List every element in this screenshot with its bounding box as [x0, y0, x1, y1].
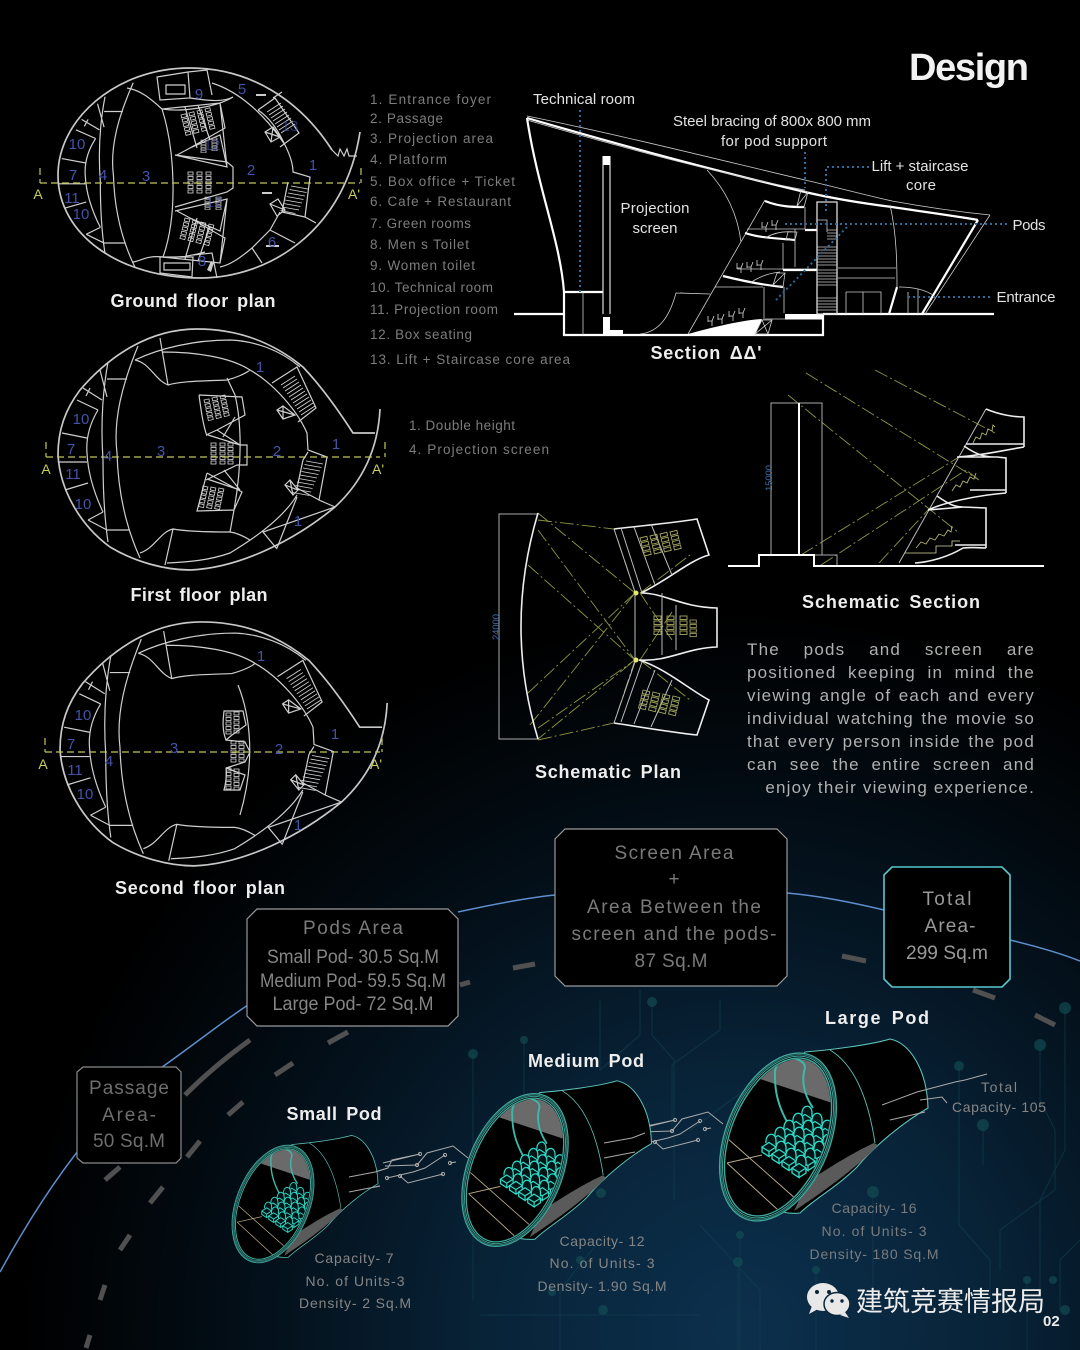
second floor plan: A — [38, 756, 48, 772]
medium pod stats — [538, 1233, 666, 1294]
first floor plan: A — [41, 461, 51, 477]
room numbers: 1 — [309, 157, 317, 174]
room legend: 10. Technical room — [370, 280, 493, 295]
explanatory paragraph: viewing angle of each and every — [747, 686, 1035, 705]
room legend: 7. Green rooms — [370, 216, 471, 231]
room legend: 12. Box seating — [370, 327, 472, 342]
schematic section drawing — [728, 370, 1044, 566]
box: screen area: + — [668, 869, 680, 890]
dimension 24000: 24000 — [491, 614, 502, 640]
first floor notes: 4. Projection screen — [409, 442, 549, 457]
box: passage area: Passage — [89, 1078, 169, 1099]
explanatory paragraph: positioned keeping in mind the — [747, 663, 1035, 682]
page number: 02 — [1043, 1313, 1060, 1330]
box: screen area — [555, 829, 787, 986]
room numbers: 4 — [105, 753, 113, 770]
room numbers: 5 — [238, 81, 246, 98]
room numbers: 7 — [67, 736, 75, 753]
box: total area: 299 Sq.m — [906, 943, 988, 964]
first floor notes: 1. Double height — [409, 418, 515, 433]
box: pods area: Small Pod- 30.5 Sq.M — [267, 947, 439, 968]
room numbers: 12 — [206, 194, 222, 211]
room numbers: 3 — [142, 168, 150, 185]
ground floor plan: A' — [348, 186, 360, 202]
box: screen area: screen and the pods- — [572, 924, 776, 945]
explanatory paragraph — [747, 640, 1035, 797]
second floor plan: A' — [370, 756, 382, 772]
room numbers: 1 — [331, 726, 339, 743]
box: pods area: Large Pod- 72 Sq.M — [272, 994, 434, 1015]
explanatory paragraph: that every person inside the pod — [747, 732, 1035, 751]
room numbers: 10 — [73, 411, 89, 428]
small pod — [216, 1127, 378, 1275]
second floor plan — [38, 622, 387, 866]
section labels: Technical room — [533, 91, 635, 108]
large pod stats: No. of Units- 3 — [822, 1223, 927, 1239]
large pod heading: Large Pod — [825, 1008, 929, 1028]
room numbers: 3 — [170, 740, 178, 757]
room legend: 6. Cafe + Restaurant — [370, 194, 511, 209]
room numbers: 11 — [67, 762, 83, 779]
circuit traces between pods — [347, 1112, 723, 1194]
first floor plan — [41, 329, 385, 570]
section labels: Entrance — [996, 289, 1056, 306]
room numbers: 7 — [69, 167, 77, 184]
section labels: Pods — [1012, 217, 1046, 234]
watermark text: 建筑竞赛情报局 — [856, 1287, 1045, 1317]
section AA heading: Section ΔΔ' — [650, 343, 762, 363]
room legend: 1. Entrance foyer — [370, 92, 492, 107]
room numbers: 12 — [204, 137, 220, 154]
box: pods area: Medium Pod- 59.5 Sq.M — [260, 971, 446, 992]
medium pod stats: No. of Units- 3 — [550, 1255, 655, 1271]
schematic plan heading: Schematic Plan — [535, 762, 681, 782]
room legend: 8. Men s Toilet — [370, 237, 469, 252]
section labels: core — [906, 177, 936, 194]
room legend: 4. Platform — [370, 152, 447, 167]
box: screen area: Screen Area — [614, 843, 734, 864]
room numbers: 10 — [77, 786, 93, 803]
box: total area: Area- — [924, 916, 976, 937]
box: passage area: Area- — [102, 1105, 156, 1126]
first floor notes — [409, 418, 549, 457]
pod internal traces — [349, 1074, 987, 1192]
box: total area: Total — [922, 889, 972, 910]
total capacity: Capacity- 105 — [952, 1099, 1046, 1115]
total capacity — [952, 1079, 1046, 1115]
room numbers — [64, 81, 317, 270]
first floor plan: A' — [372, 461, 384, 477]
explanatory paragraph: individual watching the movie so — [747, 709, 1035, 728]
room numbers: 2 — [247, 162, 255, 179]
title: Design — [909, 47, 1029, 89]
medium pod — [441, 1070, 652, 1262]
room legend: 5. Box office + Ticket — [370, 174, 515, 189]
room numbers: 11 — [65, 466, 81, 483]
room legend: 11. Projection room — [370, 302, 498, 317]
section labels: screen — [632, 220, 678, 237]
explanatory paragraph: can see the entire screen and — [747, 755, 1035, 774]
dimension 15000: 15000 — [764, 465, 775, 491]
box: passage area: 50 Sq.M — [93, 1131, 165, 1152]
schematic plan drawing — [491, 513, 717, 740]
section labels: for pod support — [721, 133, 828, 150]
medium pod stats: Capacity- 12 — [560, 1233, 645, 1249]
room numbers: 10 — [73, 206, 89, 223]
room numbers: 1 — [294, 513, 302, 530]
large pod stats — [810, 1200, 938, 1262]
large pod stats: Density- 180 Sq.M — [810, 1246, 938, 1262]
room numbers: 1 — [332, 436, 340, 453]
dotted leader lines — [580, 110, 1008, 300]
small pod stats: Density- 2 Sq.M — [299, 1295, 411, 1311]
plan seating — [639, 530, 696, 716]
section labels: Projection — [620, 200, 690, 217]
box: screen area: Area Between the — [587, 897, 761, 918]
room numbers: 1 — [257, 648, 265, 665]
room numbers: 3 — [157, 443, 165, 460]
room numbers: 1 — [256, 359, 264, 376]
large pod stats: Capacity- 16 — [832, 1200, 917, 1216]
box: screen area: 87 Sq.M — [634, 951, 708, 972]
room numbers: 10 — [69, 136, 85, 153]
room numbers: 8 — [198, 253, 206, 270]
explanatory paragraph: enjoy their viewing experience. — [765, 778, 1035, 797]
section labels: Steel bracing of 800x 800 mm — [673, 113, 871, 130]
room numbers — [67, 648, 339, 834]
section AA drawing — [514, 91, 1056, 335]
total capacity: Total — [981, 1079, 1017, 1095]
explanatory paragraph: The pods and screen are — [747, 640, 1035, 659]
icon: wechat — [807, 1283, 850, 1318]
ground floor plan — [33, 68, 361, 278]
room legend: 2. Passage — [370, 111, 443, 126]
room numbers: 10 — [75, 496, 91, 513]
box: pods area — [247, 909, 458, 1026]
small pod heading: Small Pod — [286, 1104, 382, 1124]
dashed grey road — [86, 956, 1055, 1348]
room legend — [370, 92, 570, 367]
medium pod stats: Density- 1.90 Sq.M — [538, 1278, 666, 1294]
room numbers: 2 — [273, 443, 281, 460]
large pod — [697, 1027, 928, 1238]
small pod stats: Capacity- 7 — [314, 1250, 394, 1266]
circuit board pattern — [468, 990, 1080, 1350]
room numbers: 7 — [67, 441, 75, 458]
small pod stats: No. of Units-3 — [306, 1273, 405, 1289]
room numbers: 4 — [99, 167, 107, 184]
box: passage area — [77, 1067, 181, 1163]
box: pods area: Pods Area — [303, 918, 403, 939]
section labels: Lift + staircase — [872, 158, 968, 175]
box: total area — [884, 867, 1010, 987]
small pod stats — [299, 1250, 411, 1311]
blue orbit arc — [0, 893, 1080, 1272]
room legend: 3. Projection area — [370, 131, 493, 146]
room numbers — [65, 359, 340, 530]
ground floor plan: A — [33, 186, 43, 202]
room legend: 9. Women toilet — [370, 258, 475, 273]
room numbers: 10 — [75, 707, 91, 724]
room numbers: 6 — [268, 234, 276, 251]
room numbers: 2 — [275, 741, 283, 758]
first floor plan heading: First floor plan — [130, 585, 268, 605]
second floor plan heading: Second floor plan — [115, 878, 285, 898]
schematic section heading: Schematic Section — [802, 592, 980, 612]
room numbers: 1 — [294, 817, 302, 834]
section labels — [533, 91, 1056, 306]
ground floor plan heading: Ground floor plan — [110, 291, 276, 311]
room legend: 13. Lift + Staircase core area — [370, 352, 570, 367]
room numbers: 9 — [195, 86, 203, 103]
room numbers: 4 — [104, 448, 112, 465]
room numbers: 11 — [64, 190, 80, 207]
room numbers: 13 — [282, 118, 298, 135]
medium pod heading: Medium Pod — [528, 1051, 644, 1071]
